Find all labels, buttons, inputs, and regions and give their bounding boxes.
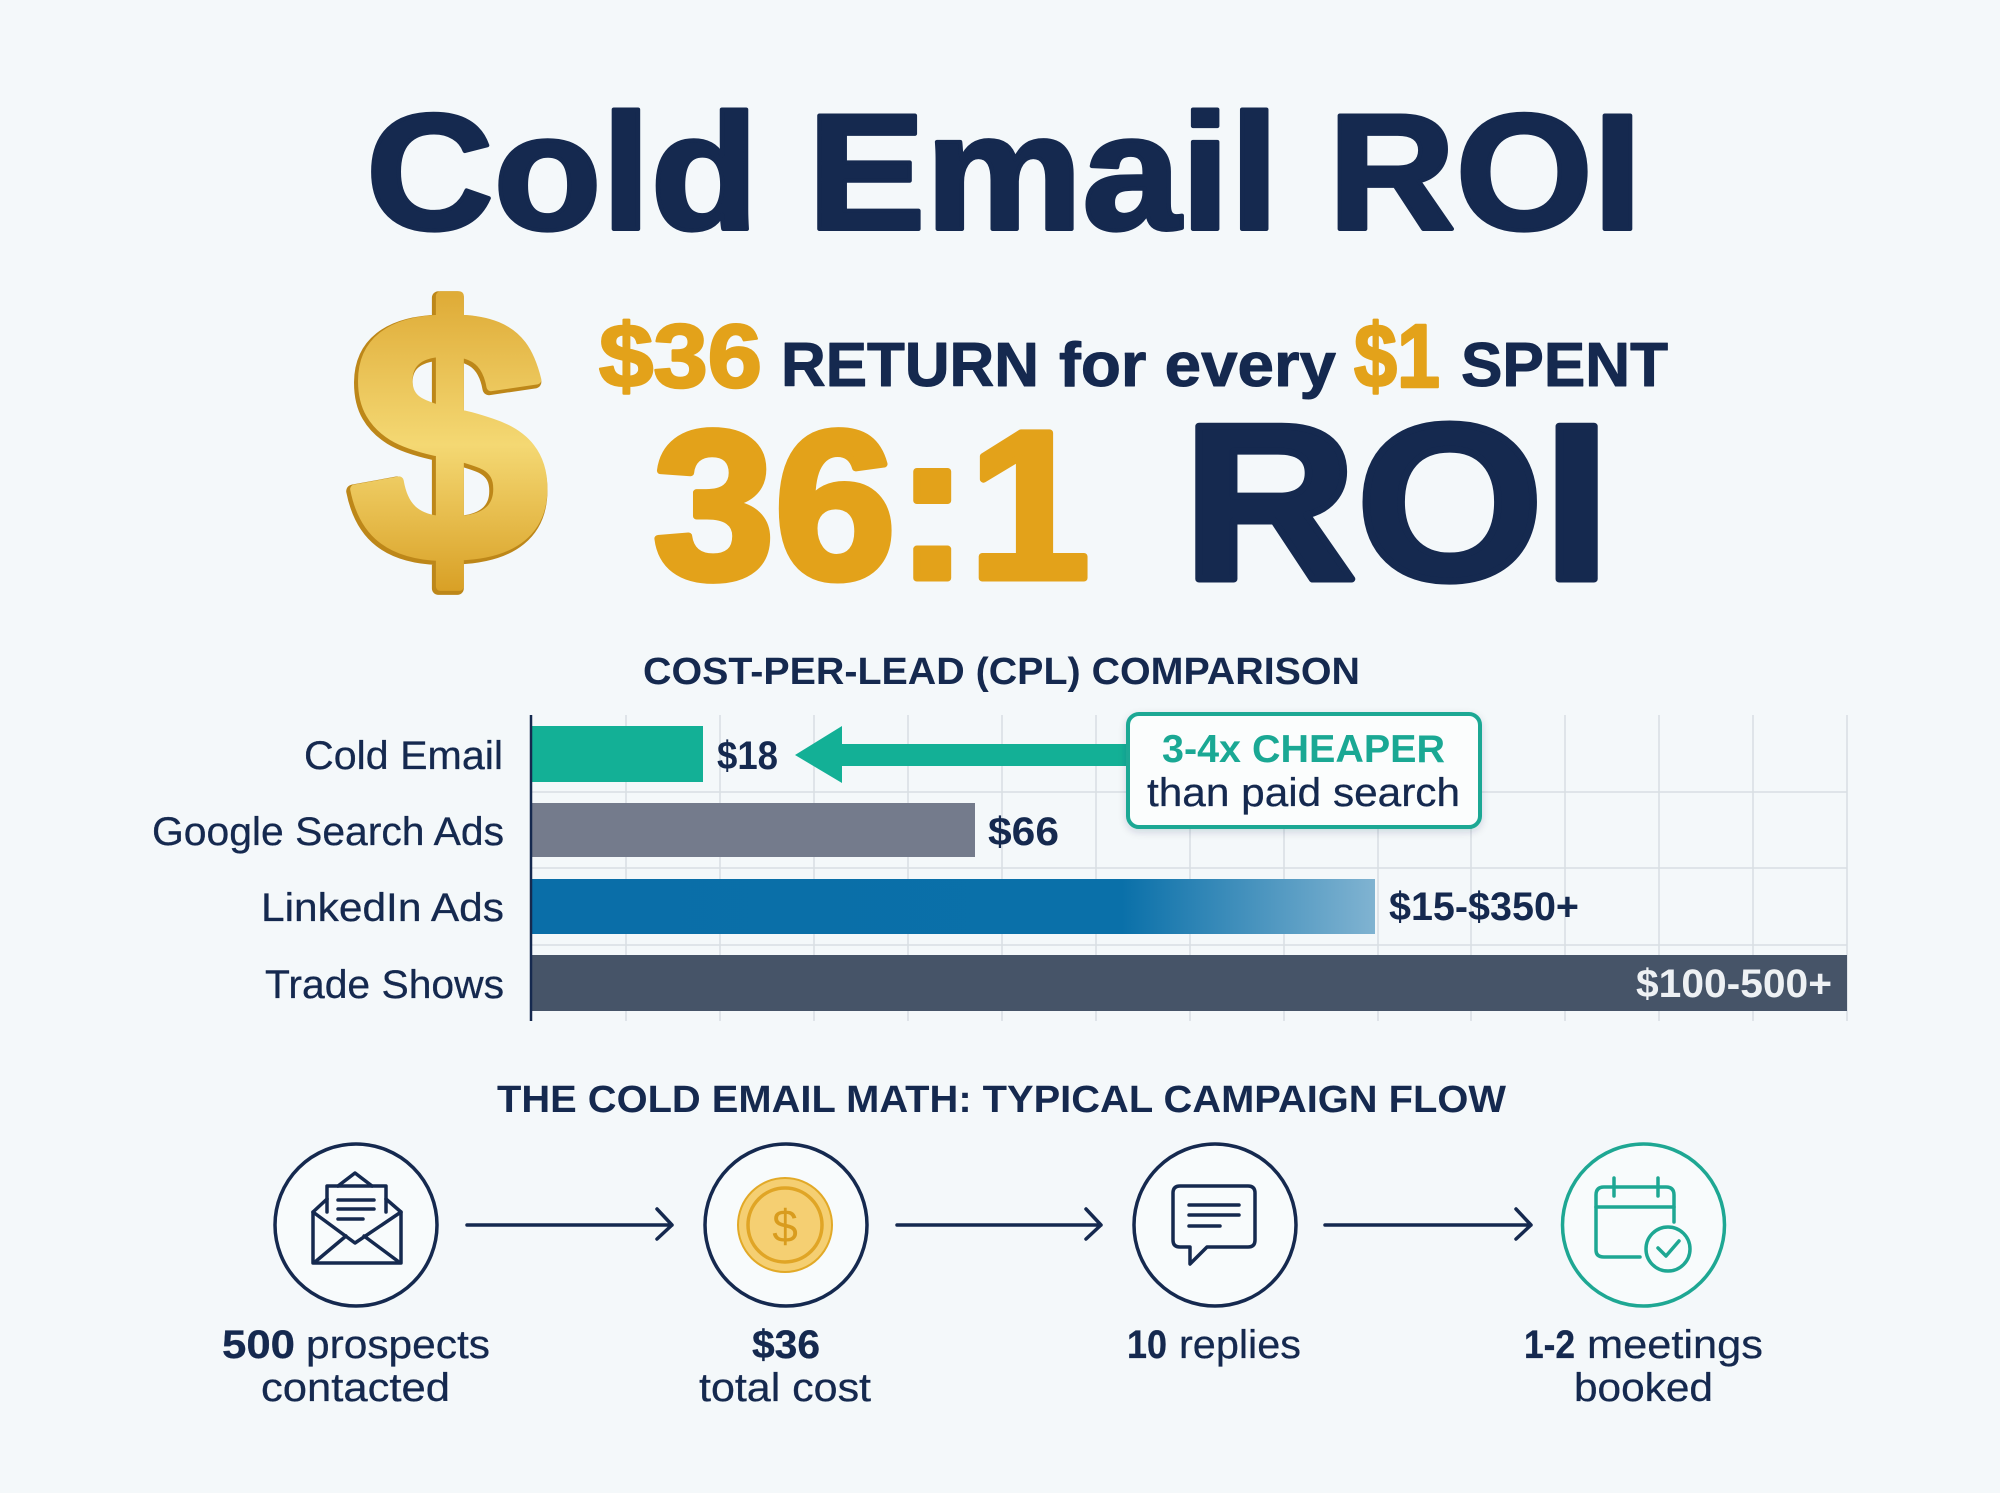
arrow: cheaper callout pointer [795, 726, 1135, 783]
label: 500 [222, 1323, 295, 1367]
bar chart: CPL comparison [152, 715, 1847, 1021]
step 4: meetings booked [1524, 1144, 1763, 1410]
label: prospects [306, 1323, 490, 1367]
value labels [717, 734, 1832, 1006]
headline: 36:1 ROI: ROI [1183, 379, 1610, 627]
icon: calendar with check [1562, 1144, 1724, 1306]
label: booked [1574, 1366, 1713, 1410]
category labels: Trade Shows [265, 963, 504, 1007]
category labels: Cold Email [304, 734, 503, 778]
icon: envelope [275, 1144, 437, 1306]
label: total cost [699, 1366, 871, 1410]
category labels [152, 734, 504, 1007]
label [222, 1323, 490, 1410]
label [699, 1323, 871, 1410]
callout: 3-4x cheaper: 3-4x CHEAPER [1162, 728, 1445, 771]
subheading: $36 return for every $1 spent: SPENT [1461, 331, 1668, 400]
bar: Trade Shows [531, 955, 1847, 1011]
subheading: $36 return for every $1 spent: $1 [1354, 307, 1440, 407]
icon: coin [705, 1144, 867, 1306]
headline: 36:1 ROI [653, 379, 1610, 627]
label: contacted [261, 1366, 450, 1410]
headline: 36:1 ROI: 36:1 [653, 387, 1090, 623]
subheading: $36 return for every $1 spent: $36 [599, 307, 762, 407]
arrow: step 3 to 4 [1325, 1209, 1531, 1239]
bar: Google Search Ads [531, 803, 975, 857]
value labels: $66 [988, 810, 1059, 854]
value labels: $15-$350+ [1389, 885, 1579, 929]
label: 1-2 [1524, 1323, 1575, 1367]
subheading: $36 return for every $1 spent: for every [1059, 331, 1337, 400]
callout: 3-4x cheaper: than paid search [1147, 771, 1460, 815]
step 1: prospects contacted [222, 1144, 490, 1410]
value labels: $100-500+ [1636, 962, 1832, 1006]
value labels: $18 [717, 734, 778, 778]
label: $36 [752, 1323, 820, 1367]
step 3: replies [1127, 1144, 1301, 1367]
label [1127, 1323, 1301, 1367]
category labels: Google Search Ads [152, 810, 504, 854]
chart axis [530, 715, 532, 1021]
arrow: step 2 to 3 [897, 1209, 1101, 1239]
subheading: $36 return for every $1 spent [599, 307, 1668, 407]
icon: coin: $ [772, 1200, 798, 1252]
category labels: LinkedIn Ads [261, 886, 504, 930]
title: Cold Email ROI [366, 80, 1642, 264]
bar: LinkedIn Ads [531, 879, 1375, 934]
icon: chat bubble [1134, 1144, 1296, 1306]
heading: cost-per-lead comparison: COST-PER-LEAD (CPL) COMPARISON [643, 651, 1360, 693]
label: meetings [1587, 1323, 1763, 1367]
subheading: $36 return for every $1 spent: RETURN [781, 331, 1039, 400]
arrow: step 1 to 2 [467, 1209, 672, 1239]
bar: Cold Email [531, 726, 703, 782]
icon: gold dollar sign: $ [348, 241, 546, 638]
callout: 3-4x cheaper [1128, 714, 1480, 827]
icon: gold dollar sign: $ [350, 239, 548, 636]
label: replies [1179, 1323, 1301, 1367]
heading: campaign flow: THE COLD EMAIL MATH: TYPICAL CAMPAIGN FLOW [497, 1079, 1506, 1121]
label: 10 [1127, 1323, 1167, 1367]
step 2: total cost [699, 1144, 871, 1410]
label [1524, 1323, 1763, 1410]
